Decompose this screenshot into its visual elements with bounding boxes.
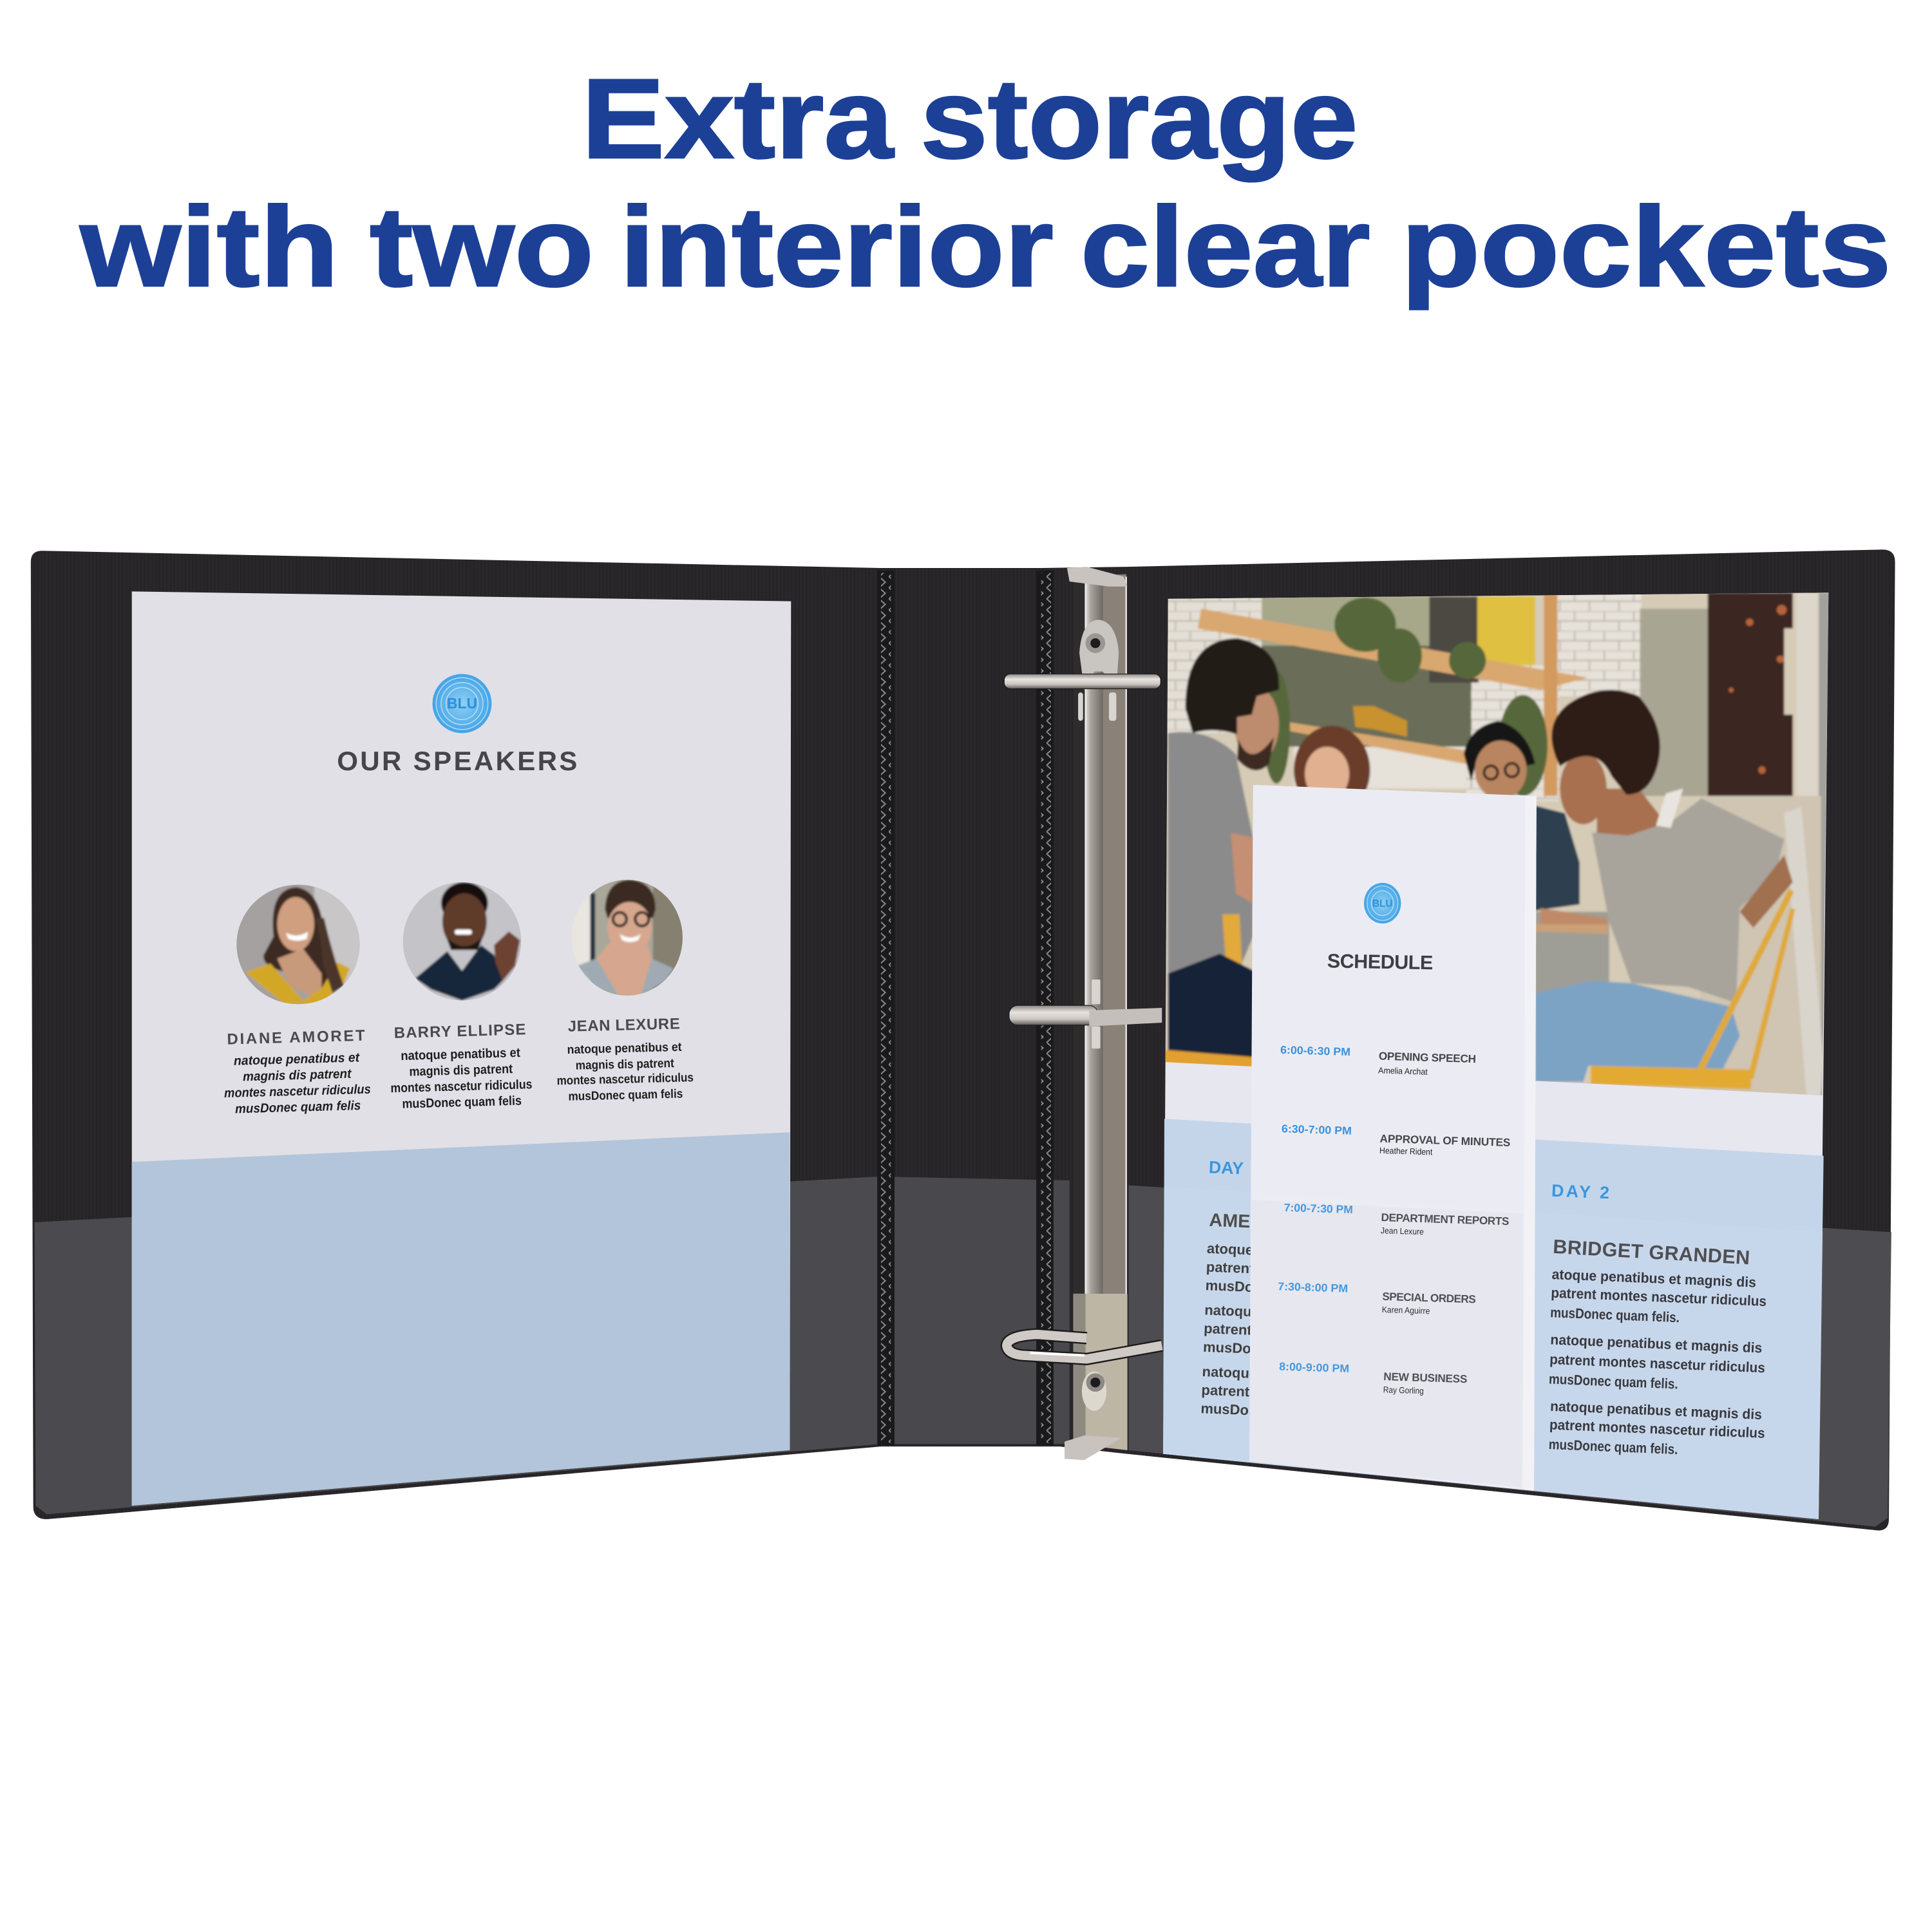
day 2: musDonec quam felis. [1549, 1371, 1678, 1392]
logo: BLU [447, 695, 477, 712]
lever bottom [1065, 1435, 1121, 1460]
lever top [1067, 567, 1128, 587]
day 1 (mostly hidden): natoque [1202, 1363, 1258, 1381]
man on left [1168, 732, 1253, 987]
day 1 (mostly hidden): natoque [1204, 1302, 1260, 1320]
row 5 [1278, 1360, 1468, 1397]
row 4 [1277, 1280, 1476, 1318]
row 5: NEW BUSINESS [1383, 1370, 1468, 1385]
row 3: 7:00-7:30 PM [1283, 1201, 1353, 1216]
day 2: natoque penatibus et magnis dis [1550, 1331, 1763, 1356]
plate right side [1103, 574, 1126, 1449]
zigzag left [881, 573, 891, 1443]
day 1 (mostly hidden) [1199, 1157, 1283, 1419]
row 3: Jean Lexure [1381, 1226, 1424, 1236]
day 2: natoque penatibus et magnis dis [1550, 1398, 1762, 1423]
grey panel and dark window [1640, 609, 1709, 796]
day 2: patrent montes nascetur ridiculus [1549, 1416, 1765, 1441]
day 1 (mostly hidden): patrent [1206, 1258, 1255, 1276]
row 4: SPECIAL ORDERS [1382, 1290, 1476, 1305]
rivet top [1079, 620, 1119, 690]
row 4: 7:30-8:00 PM [1278, 1280, 1349, 1295]
spine stitching left [877, 571, 895, 1445]
title: two [370, 184, 594, 310]
day 1 (mostly hidden): patrent [1201, 1382, 1250, 1400]
slots middle [1092, 980, 1101, 1048]
row 2: 6:30-7:00 PM [1282, 1122, 1352, 1137]
speaker: Jean [555, 1015, 694, 1104]
schedule insert [1249, 785, 1537, 1491]
title: with [79, 184, 339, 310]
row 4: Karen Aguirre [1382, 1305, 1430, 1316]
day 2: DAY 2 [1551, 1181, 1610, 1202]
agenda rows [1277, 1043, 1511, 1397]
row 5: Ray Gorling [1383, 1385, 1424, 1396]
speaker: Diane: magnis dis patrent [243, 1067, 352, 1084]
right clear pocket [1129, 1186, 1891, 1527]
logo [1364, 883, 1401, 923]
sheet paper [132, 591, 791, 1506]
speaker: Jean: natoque penatibus et [567, 1041, 682, 1057]
title: interior [620, 184, 1054, 310]
day 2: atoque penatibus et magnis dis [1551, 1266, 1756, 1291]
speaker: Barry: BARRY ELLIPSE [393, 1021, 526, 1042]
portrait: Diane [236, 885, 360, 1005]
zigzag right [1041, 573, 1051, 1443]
day 1 (mostly hidden): AMELIA [1209, 1210, 1280, 1233]
portrait: Barry [403, 882, 522, 1001]
binder infographic [31, 79, 1895, 1530]
logo: BLU [1372, 898, 1392, 909]
day 2: patrent montes nascetur ridiculus [1549, 1351, 1765, 1376]
shelves [1198, 609, 1588, 690]
speaker: Barry: montes nascetur ridiculus [390, 1077, 533, 1095]
ring 2 [1009, 1005, 1162, 1027]
day 1 (mostly hidden): patrent [1204, 1320, 1253, 1338]
row 1: OPENING SPEECH [1379, 1049, 1476, 1065]
ring mechanism [1004, 567, 1162, 1460]
speaker: Jean: JEAN LEXURE [567, 1015, 680, 1036]
day 1 (mostly hidden): musDonec [1205, 1277, 1278, 1296]
woman on right [1535, 981, 1740, 1082]
left clear pocket [35, 1177, 880, 1514]
rivet bottom [1082, 1371, 1106, 1411]
day 1 (mostly hidden): atoque [1207, 1240, 1254, 1258]
row 1: Amelia Archat [1378, 1065, 1428, 1077]
speaker: Diane: musDonec quam felis [235, 1099, 361, 1116]
speaker: Barry: magnis dis patrent [409, 1062, 513, 1079]
heading: our speakers: OUR SPEAKERS [337, 746, 577, 776]
row 5: 8:00-9:00 PM [1279, 1360, 1349, 1375]
woman on right forearm and table [1540, 908, 1609, 924]
speaker: Jean: magnis dis patrent [575, 1057, 675, 1073]
speaker: Barry: natoque penatibus et [401, 1046, 520, 1063]
day 1 (mostly hidden): musDonec [1203, 1339, 1276, 1358]
row 1: 6:00-6:30 PM [1280, 1043, 1350, 1058]
logo [433, 674, 491, 733]
base plate [1073, 573, 1128, 1450]
insert lower tint [1249, 1200, 1524, 1487]
spine clear pocket [885, 1177, 1070, 1444]
portrait: Jean [578, 880, 683, 996]
row 2: Heather Rident [1379, 1146, 1433, 1157]
ring 1 [1004, 674, 1160, 689]
woman behind [1292, 725, 1372, 790]
title: clear [1081, 184, 1370, 310]
speaker: Diane [222, 1027, 372, 1117]
day 2: musDonec quam felis. [1548, 1436, 1678, 1457]
row 3 [1283, 1201, 1510, 1239]
slots top [1078, 692, 1116, 721]
speaker: Jean: montes nascetur ridiculus [556, 1071, 694, 1088]
plate left lower section [1073, 1294, 1086, 1445]
plate highlights [1086, 576, 1126, 1294]
yellow box [1477, 596, 1535, 665]
blue agenda band [1163, 1119, 1824, 1519]
row 2 [1281, 1122, 1511, 1159]
title: pockets [1401, 184, 1891, 310]
left sheet: our speakers [132, 591, 791, 1506]
open binder [31, 549, 1895, 1530]
sheet paper [1163, 592, 1828, 1519]
bg under table [1535, 931, 1612, 999]
speaker: Diane: montes nascetur ridiculus [224, 1083, 371, 1101]
insert sheet [1249, 785, 1537, 1491]
title: Extra [582, 56, 895, 182]
centre rail [1086, 576, 1103, 1446]
tile walls [1164, 591, 1263, 733]
cafe photo [1158, 585, 1836, 1103]
man with hat [1464, 721, 1535, 781]
day 2 [1541, 1181, 1775, 1461]
day 1 (mostly hidden): musDonec [1200, 1400, 1273, 1419]
spine stitching right [1036, 571, 1054, 1445]
insert edge strip [1523, 796, 1537, 1491]
title [79, 56, 1891, 310]
right sheet: photo and day agenda [1158, 585, 1836, 1519]
cover texture [31, 549, 1895, 1530]
day 2: musDonec quam felis. [1550, 1304, 1680, 1325]
blue footer band [132, 1132, 790, 1506]
speaker: Diane: DIANE AMORET [227, 1027, 365, 1048]
row 2: APPROVAL OF MINUTES [1379, 1132, 1511, 1149]
binder cover [31, 549, 1895, 1530]
ring 3 [1007, 1334, 1162, 1359]
speaker: Barry: musDonec quam felis [402, 1094, 522, 1112]
heading: schedule: SCHEDULE [1327, 950, 1434, 974]
plate lower section [1073, 1294, 1128, 1450]
title: storage [920, 56, 1358, 182]
speaker: Barry [389, 1021, 533, 1112]
window area [1262, 642, 1471, 746]
row 3: DEPARTMENT REPORTS [1381, 1211, 1510, 1227]
pocket sheen over right sheet [1163, 1186, 1824, 1519]
day 2: patrent montes nascetur ridiculus [1551, 1285, 1767, 1309]
speaker: Diane: natoque penatibus et [234, 1050, 361, 1068]
day 1 (mostly hidden): DAY [1208, 1157, 1244, 1178]
row 1 [1280, 1043, 1476, 1078]
plants [1263, 598, 1548, 796]
day 2: BRIDGET GRANDEN [1553, 1236, 1750, 1269]
speaker: Jean: musDonec quam felis [568, 1087, 683, 1104]
